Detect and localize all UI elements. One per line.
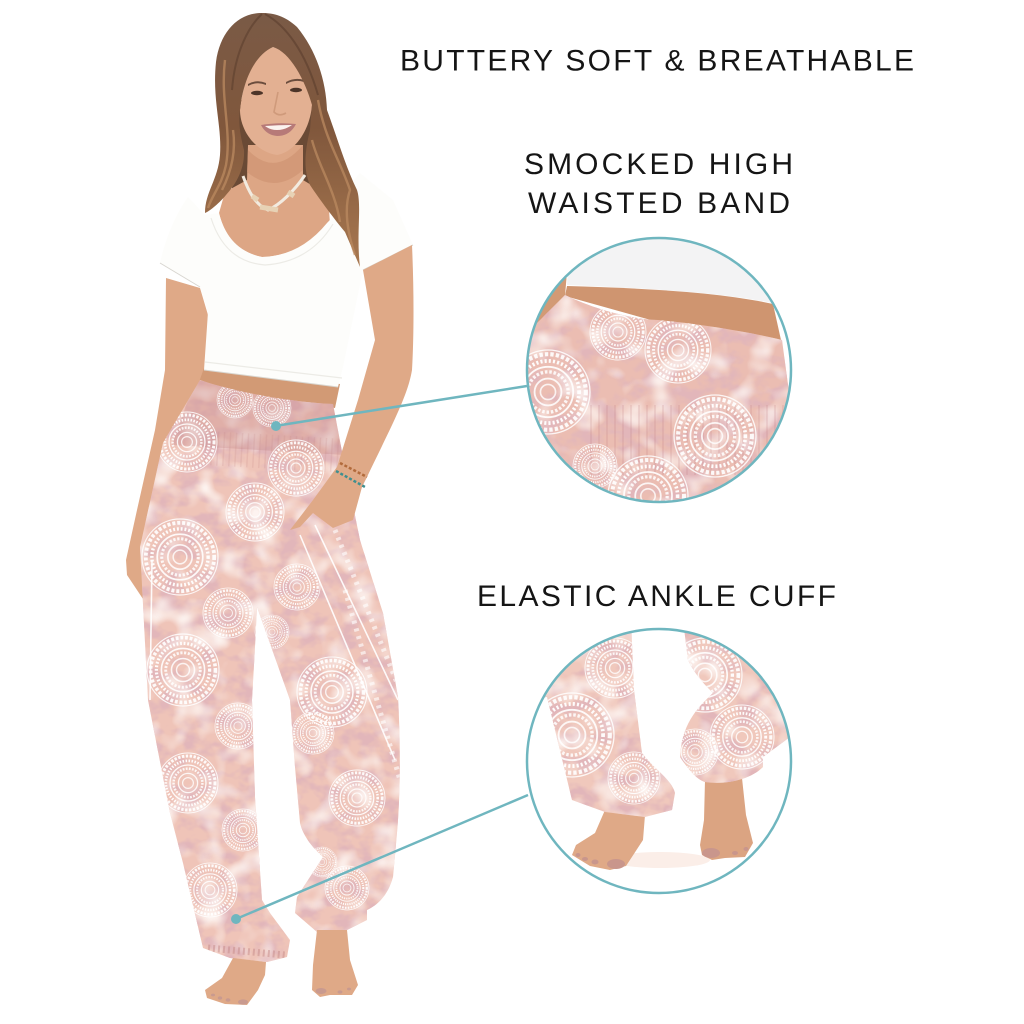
inset gathers: [590, 405, 790, 475]
waistband gathers: [205, 448, 345, 456]
mouth: [261, 123, 296, 136]
pants: [130, 370, 410, 970]
heading: elastic ankle cuff: ELASTIC ANKLE CUFF: [477, 580, 836, 613]
smocked waistband: [172, 380, 345, 455]
side stripe: [149, 524, 398, 760]
eyes: [248, 79, 304, 95]
left arm: [126, 278, 208, 602]
heading: smocked high waisted band: SMOCKED HIGH: [524, 148, 793, 181]
left foot: [205, 958, 266, 1005]
inset right foot: [700, 778, 753, 860]
inset shirt: [567, 235, 772, 303]
inset forearm: [536, 278, 566, 324]
bracelets: [336, 463, 367, 487]
inset left cuff: [544, 633, 675, 817]
back hair: [232, 100, 322, 200]
inset floor shadow: [626, 852, 710, 868]
neck and chest: [219, 145, 330, 257]
model figure: [126, 13, 414, 1005]
neck shadow: [247, 145, 303, 183]
nose shading: [274, 92, 286, 115]
heading: smocked high waisted band: WAISTED BAND: [528, 187, 790, 220]
long hair: [205, 13, 360, 267]
inset left foot: [572, 810, 645, 870]
heading: smocked high waisted band: [524, 148, 793, 220]
inset fabric: [528, 295, 788, 501]
inset: waistband detail: [526, 236, 792, 504]
necklace: [243, 175, 305, 210]
right foot: [312, 930, 358, 997]
inset skin: [565, 286, 781, 340]
white crop top: [160, 173, 413, 387]
midriff: [198, 368, 340, 408]
inset: ankle cuff detail: [526, 628, 792, 894]
leader line: ankle cuff: [231, 795, 528, 924]
heading: buttery soft: BUTTERY SOFT & BREATHABLE: [400, 44, 914, 78]
right arm and hand: [290, 245, 414, 530]
mandala print: [142, 519, 218, 595]
cuff gathers: [208, 948, 285, 955]
face: [240, 47, 312, 155]
leader line: waistband: [271, 386, 527, 431]
inset right cuff: [680, 632, 788, 783]
hair highlights: [208, 60, 355, 255]
